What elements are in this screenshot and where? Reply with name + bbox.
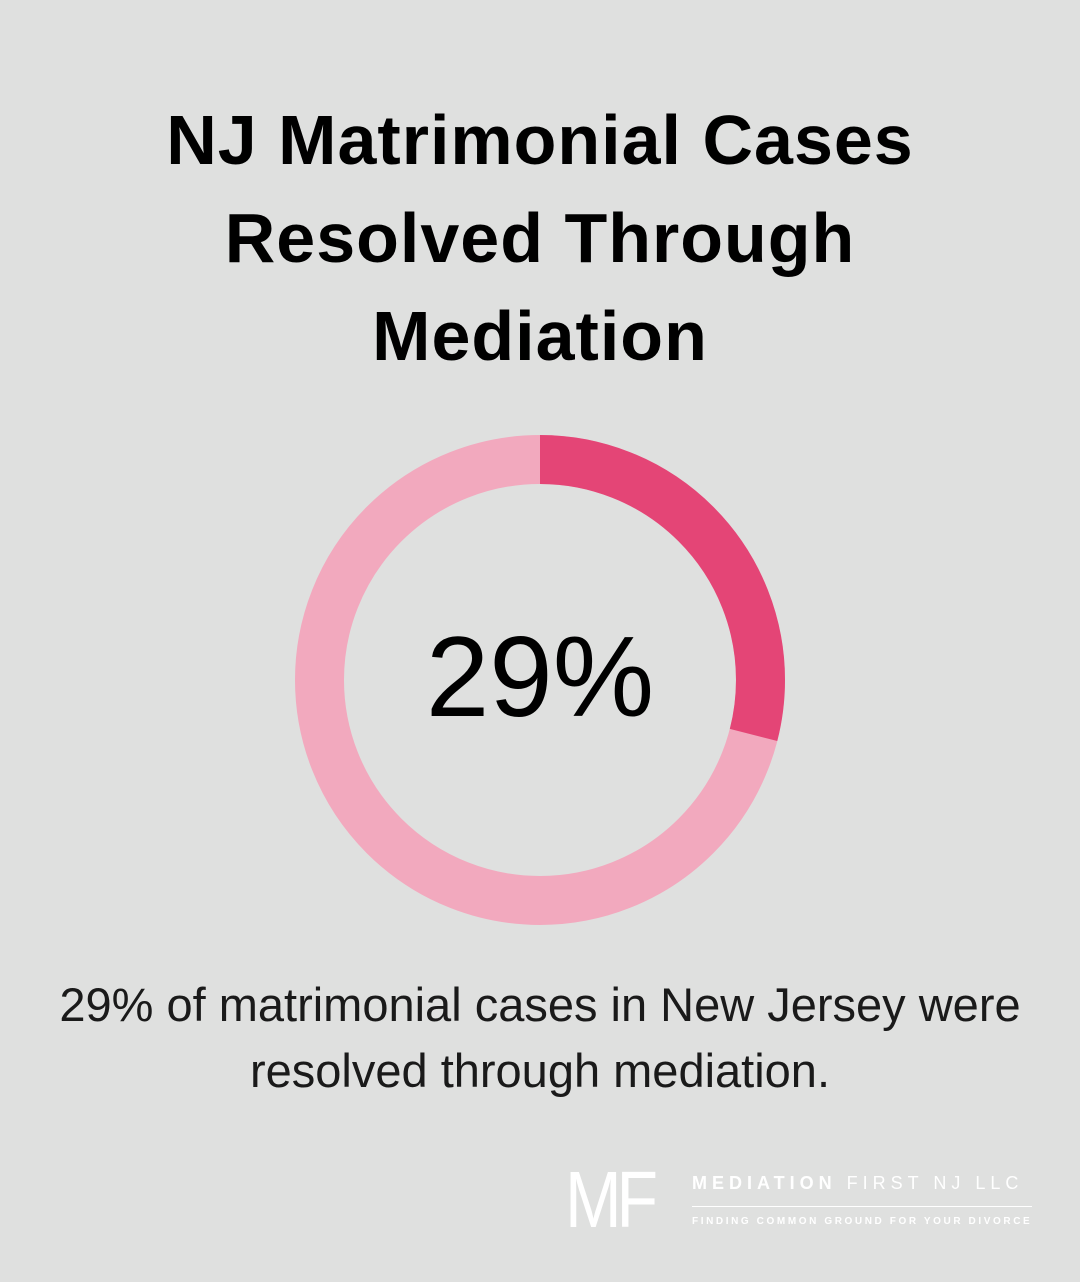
caption xyxy=(59,978,1021,1097)
caption: resolved through mediation. xyxy=(250,1044,830,1097)
title: Resolved Through xyxy=(225,199,855,277)
title: NJ Matrimonial Cases xyxy=(166,101,914,179)
logo xyxy=(565,1155,1032,1244)
caption: 29% of matrimonial cases in New Jersey were xyxy=(59,978,1021,1031)
title: Mediation xyxy=(372,297,708,375)
logo: FINDING COMMON GROUND FOR YOUR DIVORCE xyxy=(692,1216,1032,1227)
donut chart: 29% xyxy=(426,614,654,741)
logo: MEDIATION FIRST NJ LLC xyxy=(692,1173,1023,1193)
title xyxy=(166,101,914,375)
logo: MF xyxy=(565,1155,653,1244)
